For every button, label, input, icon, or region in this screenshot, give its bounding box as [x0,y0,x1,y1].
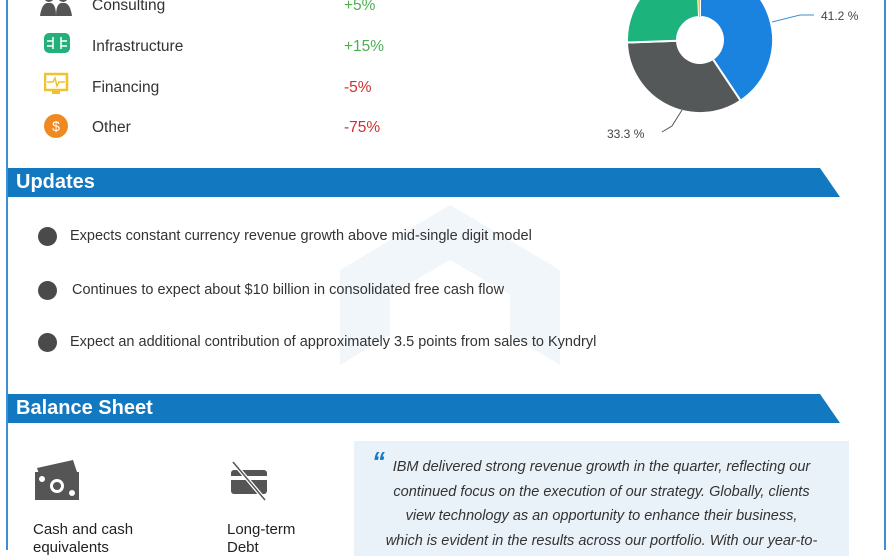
debt item: Long-term [227,521,295,538]
label 41.2 [772,9,859,23]
header: balance sheet [8,394,840,423]
row: other: Other [92,119,131,136]
segment list [40,0,384,138]
header: balance sheet: Balance Sheet [16,397,153,419]
updates list [38,227,596,352]
header: updates [8,168,840,197]
row: other: -75% [344,119,380,136]
debt item: Debt [227,539,259,556]
bullet 2: Continues to expect about $10 billion in consolidated free cash flow [72,282,504,298]
row: financing: Financing [92,79,159,96]
quote box [354,441,849,556]
label 33.3 [607,110,682,141]
debt item [227,462,295,556]
row: infrastructure: +15% [344,38,384,55]
row: financing [44,72,372,96]
watermark [340,205,560,365]
row: consulting [40,0,375,16]
label 33.3: 33.3 % [607,127,645,141]
quote box: which is evident in the results across our portfolio. With our year-to- [386,532,817,548]
quote box: “ [372,446,385,476]
header: updates: Updates [16,171,95,193]
row: other [44,114,380,138]
cash item [33,460,133,556]
quote box: view technology as an opportunity to enhance their business, [406,508,797,524]
row: infrastructure: Infrastructure [92,38,183,55]
bullet 3: Expect an additional contribution of approximately 3.5 points from sales to Kyndryl [70,334,596,350]
cash item: equivalents [33,539,109,556]
row: other: $ [52,118,60,134]
icon: card [231,462,267,500]
label 41.2: 41.2 % [821,9,859,23]
donut chart [607,0,859,141]
row: financing: -5% [344,79,372,96]
row: infrastructure [44,33,384,55]
quote box: IBM delivered strong revenue growth in the quarter, reflecting our [393,459,810,475]
bullet 1: Expects constant currency revenue growth above mid-single digit model [70,228,532,244]
quote box: continued focus on the execution of our strategy. Globally, clients [393,484,810,500]
cash item: Cash and cash [33,521,133,538]
icon: cash [35,460,79,500]
